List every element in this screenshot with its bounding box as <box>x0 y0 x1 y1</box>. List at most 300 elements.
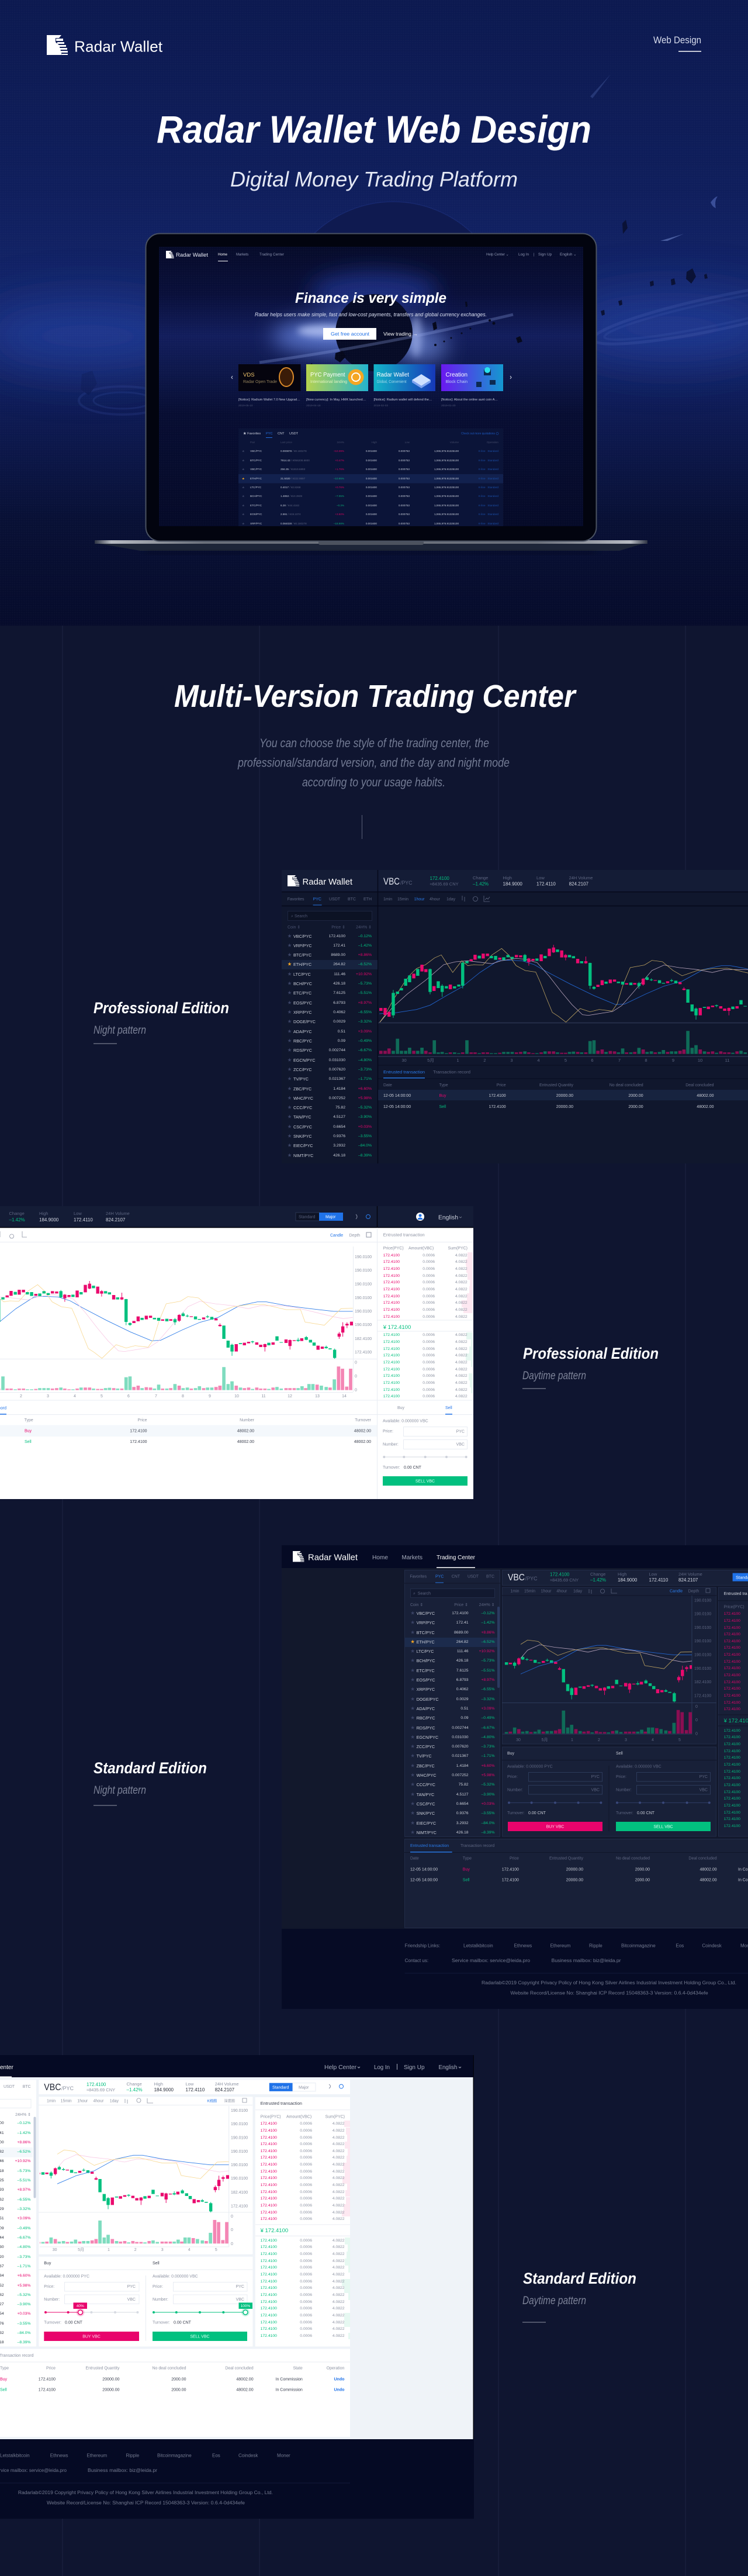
price axis: 0 <box>231 2242 233 2246</box>
coin list: EIEC/PYC <box>293 1143 313 1148</box>
time axis: 2 <box>134 2248 137 2252</box>
ticker header: /PYC <box>525 1576 538 1581</box>
coin list: 6.8793 <box>333 1001 345 1005</box>
trade forms: VBC <box>127 2298 136 2302</box>
market table rows: ★ <box>242 468 245 471</box>
laptop screen artwork <box>159 247 583 526</box>
trading center section background and headings <box>62 626 686 2576</box>
notices: 2019-04-18 <box>306 404 321 408</box>
market tabs: USDT <box>329 897 341 902</box>
footer: Website Record/License No: Shanghai ICP Record 15048363-3 Version: 0.6.4-0d434efe <box>47 2500 245 2506</box>
coin list: TV/PYC <box>417 1753 432 1759</box>
coin list: 1.4184 <box>456 1764 469 1768</box>
trade form: Available: 0.000000 VBC <box>383 1420 428 1423</box>
order book buy side: 0.0006 <box>300 2334 312 2338</box>
order book prices: 172.4100 <box>724 1770 740 1774</box>
screen nav: Trading Center <box>259 253 284 257</box>
coin list: ★ <box>411 1821 415 1825</box>
coin list: ★ <box>288 1068 292 1072</box>
hero section <box>0 0 748 626</box>
coin list: ★ <box>411 1611 415 1615</box>
coin list: ★ <box>411 1831 415 1835</box>
coin list: –5.32% <box>482 1783 495 1787</box>
orders table: Date <box>383 1083 392 1087</box>
coin list: 3.2932 <box>456 1821 469 1825</box>
footer: Bitcoinmagazine <box>157 2453 192 2458</box>
coin list: 172.4100 <box>329 934 345 938</box>
trade forms: Sell <box>616 1752 623 1756</box>
coin list: –3.55% <box>18 2322 31 2326</box>
screen nav: Radar Wallet <box>176 252 208 258</box>
market table rows: 0.001600 <box>366 477 377 480</box>
order book sell side: 4.0822 <box>455 1301 468 1305</box>
market table rows: 0.000753 <box>399 450 410 453</box>
coin list: 0.0029 <box>456 1697 469 1701</box>
coin list: DOGE/PYC <box>417 1697 439 1702</box>
coin list: 0.09 <box>460 1716 469 1720</box>
coin list: ★ <box>288 1048 292 1052</box>
account <box>416 1213 462 1221</box>
order book prices <box>724 1612 740 1828</box>
orders table: 48002.00 <box>236 2388 254 2392</box>
trade forms: PYC <box>591 1775 600 1779</box>
coin list: –1.42% <box>18 2130 31 2135</box>
notices: [Notice]: About the online aunt coin A… <box>441 398 498 402</box>
coin list: 0.002744 <box>452 1726 469 1730</box>
order book sell side: 4.0822 <box>455 1294 468 1299</box>
footer: Ripple <box>589 1943 602 1948</box>
market table rows: 0.001600 <box>366 504 377 507</box>
coin list: ZBC/PYC <box>417 1763 435 1769</box>
footer <box>405 1943 748 1996</box>
market tabs and search: PYC <box>435 1575 444 1579</box>
market table background: USDT <box>289 432 299 436</box>
market tabs and search: 24H% ⇕ <box>15 2112 31 2117</box>
coin list: ★ <box>411 1811 415 1815</box>
coin list: –3.73% <box>482 1745 495 1749</box>
card: radar wallet: Global, Convenient <box>377 379 407 384</box>
coin list: –3.90% <box>358 1115 372 1119</box>
market table rows: 6.28 / ¥44.4163 <box>280 504 299 507</box>
screen nav: Sign Up <box>538 253 552 257</box>
chart toolbar: 1hour <box>77 2099 88 2103</box>
time axis: 14 <box>342 1394 347 1399</box>
coin list: +5.98% <box>481 1773 495 1777</box>
chart toolbar: 4hour <box>430 897 441 902</box>
market tabs and search: BTC <box>486 1575 494 1579</box>
orders table: 172.4100 <box>489 1094 506 1098</box>
market table rows: 0.084028 / ¥0.180278 <box>280 522 307 525</box>
chart toolbar: 1hour <box>541 1589 552 1594</box>
order book sell side: 172.4100 <box>261 2122 277 2126</box>
chart toolbar: K线图 <box>207 2098 217 2103</box>
coin list: SNK/PYC <box>417 1811 435 1816</box>
order book sell side: 0.0006 <box>300 2156 312 2160</box>
order book buy side: 172.4100 <box>383 1394 400 1399</box>
ticker header: 824.2107 <box>106 1217 126 1223</box>
order book sell side: 172.4100 <box>383 1280 400 1284</box>
order book buy side: 0.0006 <box>300 2293 312 2297</box>
order book buy side: 0.0006 <box>300 2286 312 2290</box>
navigation <box>293 1551 476 1568</box>
trade form: Turnover: <box>383 1466 400 1470</box>
orders table: No deal concluded <box>152 2367 186 2370</box>
time axis: 9 <box>209 1394 211 1399</box>
coin list: ★ <box>288 1086 292 1091</box>
navigation: English <box>438 2064 457 2071</box>
order book buy side: 172.4100 <box>383 1381 400 1385</box>
coin list: –5.51% <box>482 1669 495 1673</box>
ticker header: ≈8435.69 CNY <box>430 882 459 886</box>
market table rows: 21.5020 / ¥222.9897 <box>280 477 305 480</box>
orders table: 48002.00 <box>699 1878 717 1883</box>
market table rows: 1,065,976.91325100 <box>434 468 459 471</box>
trade forms: Price: <box>507 1775 518 1779</box>
order book sell side: 172.4100 <box>261 2211 277 2215</box>
coin list: –6.52% <box>482 1640 495 1644</box>
time axis: 4 <box>537 1058 540 1063</box>
footer: Radarlab©2019 Copyright Privacy Policy of Hong Kong Silver Airlines Industrial Investment Holding Group Co., Ltd. <box>18 2490 273 2495</box>
coin list: –84.0% <box>18 2331 31 2335</box>
market table rows: 0.000753 <box>399 477 410 480</box>
footer: Business mailbox: biz@leida.pr <box>552 1958 621 1963</box>
order book prices: 172.4100 <box>724 1639 740 1643</box>
market table rows: 0.001600 <box>366 513 377 516</box>
order book sell side: 0.0006 <box>423 1267 435 1271</box>
price axis: 190.0100 <box>355 1323 372 1327</box>
coin list: 6.8793 <box>456 1678 469 1682</box>
coin list: 0.002744 <box>329 1048 345 1052</box>
trade forms: 0.00 CNT <box>528 1811 546 1815</box>
coin list: ★ <box>411 1764 415 1768</box>
ticker header: Low <box>649 1572 657 1577</box>
coin list: ZCC/PYC <box>417 1744 435 1749</box>
sliders: 100% <box>241 2304 251 2308</box>
market table rows: K-line Standard <box>479 504 498 507</box>
orders table: Entrusted Quantity <box>539 1083 573 1087</box>
market table rows: LTC/PYC <box>250 486 261 489</box>
order book prices: 172.4100 <box>724 1625 740 1630</box>
order book prices: 172.4100 <box>724 1619 740 1623</box>
coin list: ★ <box>411 1631 415 1635</box>
coin list <box>411 1611 495 1835</box>
orders table: Number <box>240 1418 255 1422</box>
coin list: –3.90% <box>482 1793 495 1797</box>
order book prices: 172.4100 <box>724 1742 740 1746</box>
chart toolbar: 15min <box>524 1589 535 1594</box>
order book buy side: 0.0006 <box>423 1394 435 1399</box>
order book sell side: 172.4100 <box>383 1274 400 1278</box>
orders table: 48002.00 <box>697 1094 714 1098</box>
coin list: –3.55% <box>482 1811 495 1815</box>
ticker header: Low <box>186 2081 194 2087</box>
coin list: CSC/PYC <box>417 1801 435 1807</box>
ticker header: 184.9000 <box>39 1217 59 1223</box>
price axis: 0 <box>231 2215 233 2219</box>
coin list: –5.32% <box>358 1106 372 1110</box>
market table rows: EOS/PYC <box>250 513 262 516</box>
market table rows: ★ <box>242 495 245 498</box>
market table rows: ★ <box>242 522 245 525</box>
trade forms: Available: 0.000000 PYC <box>44 2274 89 2279</box>
ticker header: Standard <box>272 2086 289 2090</box>
coin list: 0.6654 <box>456 1802 469 1806</box>
panel: standard edition night <box>282 1545 748 2009</box>
order book buy side: 172.4100 <box>383 1374 400 1378</box>
market tabs: Favorites <box>288 897 304 902</box>
market table background: PYC <box>266 432 273 436</box>
market table rows: 1,065,976.91325100 <box>434 477 459 480</box>
trade forms: PYC <box>699 1775 708 1779</box>
trade forms: Available: 0.000000 VBC <box>153 2274 198 2279</box>
order book sell side: 0.0006 <box>423 1308 435 1312</box>
price axis: 190.0100 <box>694 1626 711 1630</box>
order book buy side: 4.0822 <box>455 1340 468 1344</box>
market table rows: ★ <box>242 504 245 507</box>
coin list: BTC/PYC <box>293 952 311 958</box>
order book buy side: 0.0006 <box>300 2273 312 2277</box>
order book sell side: 4.0822 <box>455 1280 468 1284</box>
order book sell side: 172.4100 <box>383 1287 400 1292</box>
ticker header: 172.4110 <box>649 1577 669 1583</box>
coin list: EGCN/PYC <box>417 1735 438 1740</box>
screen headline: Radar helps users make simple, fast and low-cost payments, transfers and global currency exchanges. <box>255 312 487 318</box>
coin list: 264.82 <box>333 962 345 966</box>
order book sell side: 172.4100 <box>383 1254 400 1257</box>
market table rows: K-line Standard <box>479 450 498 453</box>
trade forms: Number: <box>44 2298 60 2302</box>
coin list: –5.73% <box>482 1659 495 1663</box>
chart toolbar: 1day <box>110 2099 119 2103</box>
footer: Letstalkbitcoin <box>463 1943 493 1948</box>
order book sell side: 4.0822 <box>333 2156 345 2160</box>
orders table: 48002.00 <box>237 1440 254 1444</box>
coin list <box>0 2121 31 2344</box>
order book header: Entrusted transaction <box>261 2102 302 2106</box>
label: professional day: Daytime pattern <box>522 1370 586 1382</box>
coin list: 8689.00 <box>331 953 345 957</box>
orders table: Transaction record <box>433 1071 470 1075</box>
order book sell side: 4.0822 <box>333 2211 345 2215</box>
footer: Bitcoinmagazine <box>621 1943 656 1948</box>
footer <box>0 2453 350 2506</box>
trade forms: 0.00 CNT <box>637 1811 655 1815</box>
market table rows: ★ <box>242 450 245 453</box>
time axis: 9 <box>672 1058 674 1063</box>
coin list: ★ <box>288 1030 292 1034</box>
coin list: 0.4062 <box>456 1687 469 1691</box>
version toggle <box>296 1213 370 1221</box>
chart toolbar <box>47 2098 247 2104</box>
order book header: Amount(VBC) <box>408 1246 434 1251</box>
order book sell side: 0.0006 <box>423 1254 435 1257</box>
coin list: –3.90% <box>18 2302 31 2306</box>
orders table: Sell <box>0 2388 7 2392</box>
order book sell side: 0.0006 <box>423 1301 435 1305</box>
order book header: Sum(PYC) <box>448 1246 468 1251</box>
orders table: 172.4100 <box>502 1867 519 1872</box>
card: PYC payment: International landing <box>310 379 347 384</box>
coin list: RBC/PYC <box>293 1038 312 1044</box>
coin list: –6.67% <box>482 1726 495 1730</box>
trade form: Sell <box>445 1406 452 1410</box>
order book sell side: 172.4100 <box>261 2149 277 2153</box>
coin list: ★ <box>411 1773 415 1777</box>
price axis: 190.0100 <box>231 2150 248 2154</box>
coin list: ADA/PYC <box>293 1029 312 1034</box>
order book sell side: 4.0822 <box>333 2135 345 2140</box>
orders table <box>410 1844 748 1883</box>
notices: 2019-05-10 <box>238 404 253 408</box>
coin list: +6.60% <box>17 2274 31 2278</box>
trade form: Buy <box>397 1406 405 1410</box>
coin list: +6.60% <box>358 1086 372 1091</box>
order book sell side: 0.0006 <box>300 2170 312 2174</box>
price axis: 172.4100 <box>231 2204 248 2209</box>
market tabs and search: Favorites <box>410 1575 427 1579</box>
market table rows: K-line Standard <box>479 468 498 471</box>
coin list: EIEC/PYC <box>417 1821 436 1826</box>
order book sell side: 172.4100 <box>261 2204 277 2208</box>
coin list: 426.18 <box>456 1659 469 1663</box>
market table rows: K-line Standard <box>479 495 498 498</box>
market table rows: 0.000753 <box>399 504 410 507</box>
order book buy side: 172.4100 <box>261 2321 277 2325</box>
trade forms: Number: <box>507 1788 523 1793</box>
candlestick chart <box>504 1656 692 1734</box>
trade form: Price: <box>383 1429 393 1434</box>
screen nav: | <box>534 253 535 257</box>
coin list: –4.80% <box>482 1735 495 1739</box>
order book buy side: 172.4100 <box>261 2252 277 2256</box>
orders table: Date <box>410 1857 419 1860</box>
coin list: +6.60% <box>481 1764 495 1768</box>
order book prices: 172.4100 <box>724 1666 740 1670</box>
search box <box>288 911 372 920</box>
footer: Friendship Links: <box>405 1943 440 1948</box>
ticker header: VBC <box>508 1573 525 1583</box>
ticker header: /PYC <box>400 880 413 886</box>
order book sell side: 4.0822 <box>333 2197 345 2201</box>
tag: web design <box>653 34 701 51</box>
order book sell side: 0.0006 <box>300 2122 312 2126</box>
coin list: –6.55% <box>482 1687 495 1691</box>
ticker header: 172.4100 <box>430 876 449 881</box>
coin list: ★ <box>411 1640 415 1644</box>
order book buy side: 4.0822 <box>333 2286 345 2290</box>
market table rows: 0.001600 <box>366 522 377 525</box>
market table rows: ★ <box>242 459 245 462</box>
market tabs and search: CNT <box>452 1575 460 1579</box>
time axis: 5 <box>565 1058 567 1063</box>
time axis: 13 <box>315 1394 320 1399</box>
coin list: –3.73% <box>18 2255 31 2259</box>
time axis: 4 <box>188 2248 191 2252</box>
coin list: LTC/PYC <box>417 1649 434 1654</box>
coin list: –3.55% <box>358 1134 372 1138</box>
label: professional day <box>522 1345 659 1389</box>
coin list: ★ <box>411 1669 415 1673</box>
market table background: Low <box>405 441 410 444</box>
trade forms: VBC <box>591 1788 600 1793</box>
coin list: –8.39% <box>482 1831 495 1835</box>
coin list: DOGE/PYC <box>293 1019 316 1024</box>
market table rows: ETC/PYC <box>250 504 262 507</box>
laptop base <box>95 540 647 554</box>
orders table: Undo <box>334 2388 344 2392</box>
orders table: 172.4100 <box>489 1105 506 1109</box>
orders table: 20000.00 <box>102 2377 120 2382</box>
order book buy side: 4.0822 <box>455 1374 468 1378</box>
coin list: –4.80% <box>18 2245 31 2249</box>
orders table: Price <box>138 1418 147 1422</box>
ticker header: High <box>503 875 512 880</box>
order book buy side: 0.0006 <box>423 1368 435 1372</box>
orders table: In Commission <box>276 2388 303 2392</box>
order book buy side: 0.0006 <box>300 2327 312 2331</box>
order book header <box>383 1234 468 1331</box>
trade form: Number: <box>383 1443 399 1446</box>
footer: Service mailbox: service@leida.pro <box>452 1958 531 1963</box>
price axis: 190.0100 <box>694 1598 711 1603</box>
market table background: ★ Favorites <box>243 432 261 436</box>
order book prices: 172.4100 <box>724 1824 740 1828</box>
market table background: Operation <box>487 441 498 444</box>
order book buy side: 172.4100 <box>261 2334 277 2338</box>
order book buy side <box>261 2239 345 2338</box>
coin list: ★ <box>411 1802 415 1806</box>
trade forms: Turnover: <box>616 1811 633 1815</box>
ticker header: Low <box>74 1211 82 1216</box>
order book sell side: 172.4100 <box>261 2176 277 2180</box>
market table rows: 1,065,976.91325100 <box>434 522 459 525</box>
order book buy side: 4.0822 <box>455 1353 468 1358</box>
version toggle: Major <box>325 1215 336 1220</box>
coin list: –6.67% <box>358 1048 372 1052</box>
orders table: Entrusted transaction <box>383 1071 425 1075</box>
market table rows: VBC/PYC <box>250 450 262 453</box>
order book sell side: 4.0822 <box>333 2204 345 2208</box>
market table rows: 0.001600 <box>366 450 377 453</box>
market table rows: 1,065,976.91325100 <box>434 486 459 489</box>
trade forms: PYC <box>236 2285 244 2289</box>
order book prices: 172.4100 <box>724 1790 740 1794</box>
search box: ⌕ Search <box>291 914 307 918</box>
market table rows: 0.000753 <box>399 459 410 462</box>
order book buy side: 172.4100 <box>261 2266 277 2270</box>
time axis: 5月 <box>427 1058 434 1063</box>
chart toolbar: Depth <box>349 1234 360 1238</box>
order book sell side: 172.4100 <box>383 1260 400 1264</box>
coin list: ETH/PYC <box>293 962 311 967</box>
label: professional day: Professional Edition <box>523 1345 659 1362</box>
chart toolbar: 1min <box>47 2099 56 2103</box>
order book header: Price(PYC) <box>261 2115 281 2119</box>
card: radar wallet: Radar Wallet <box>377 372 409 378</box>
time axis: 2 <box>483 1058 486 1063</box>
coin list: 75.82 <box>335 1106 345 1110</box>
logo: Radar Wallet <box>303 877 353 887</box>
price axis: 182.4100 <box>355 1337 372 1341</box>
coin list: –5.73% <box>18 2169 31 2173</box>
coin list: +8.86% <box>358 953 372 957</box>
label: standard day: Standard Edition <box>523 2270 636 2287</box>
price axis: 190.0100 <box>355 1296 372 1300</box>
market table background: Pair <box>250 441 255 444</box>
order book buy side: 172.4100 <box>261 2239 277 2243</box>
time axis: 2 <box>20 1394 22 1399</box>
navigation: Sign Up <box>404 2064 425 2071</box>
